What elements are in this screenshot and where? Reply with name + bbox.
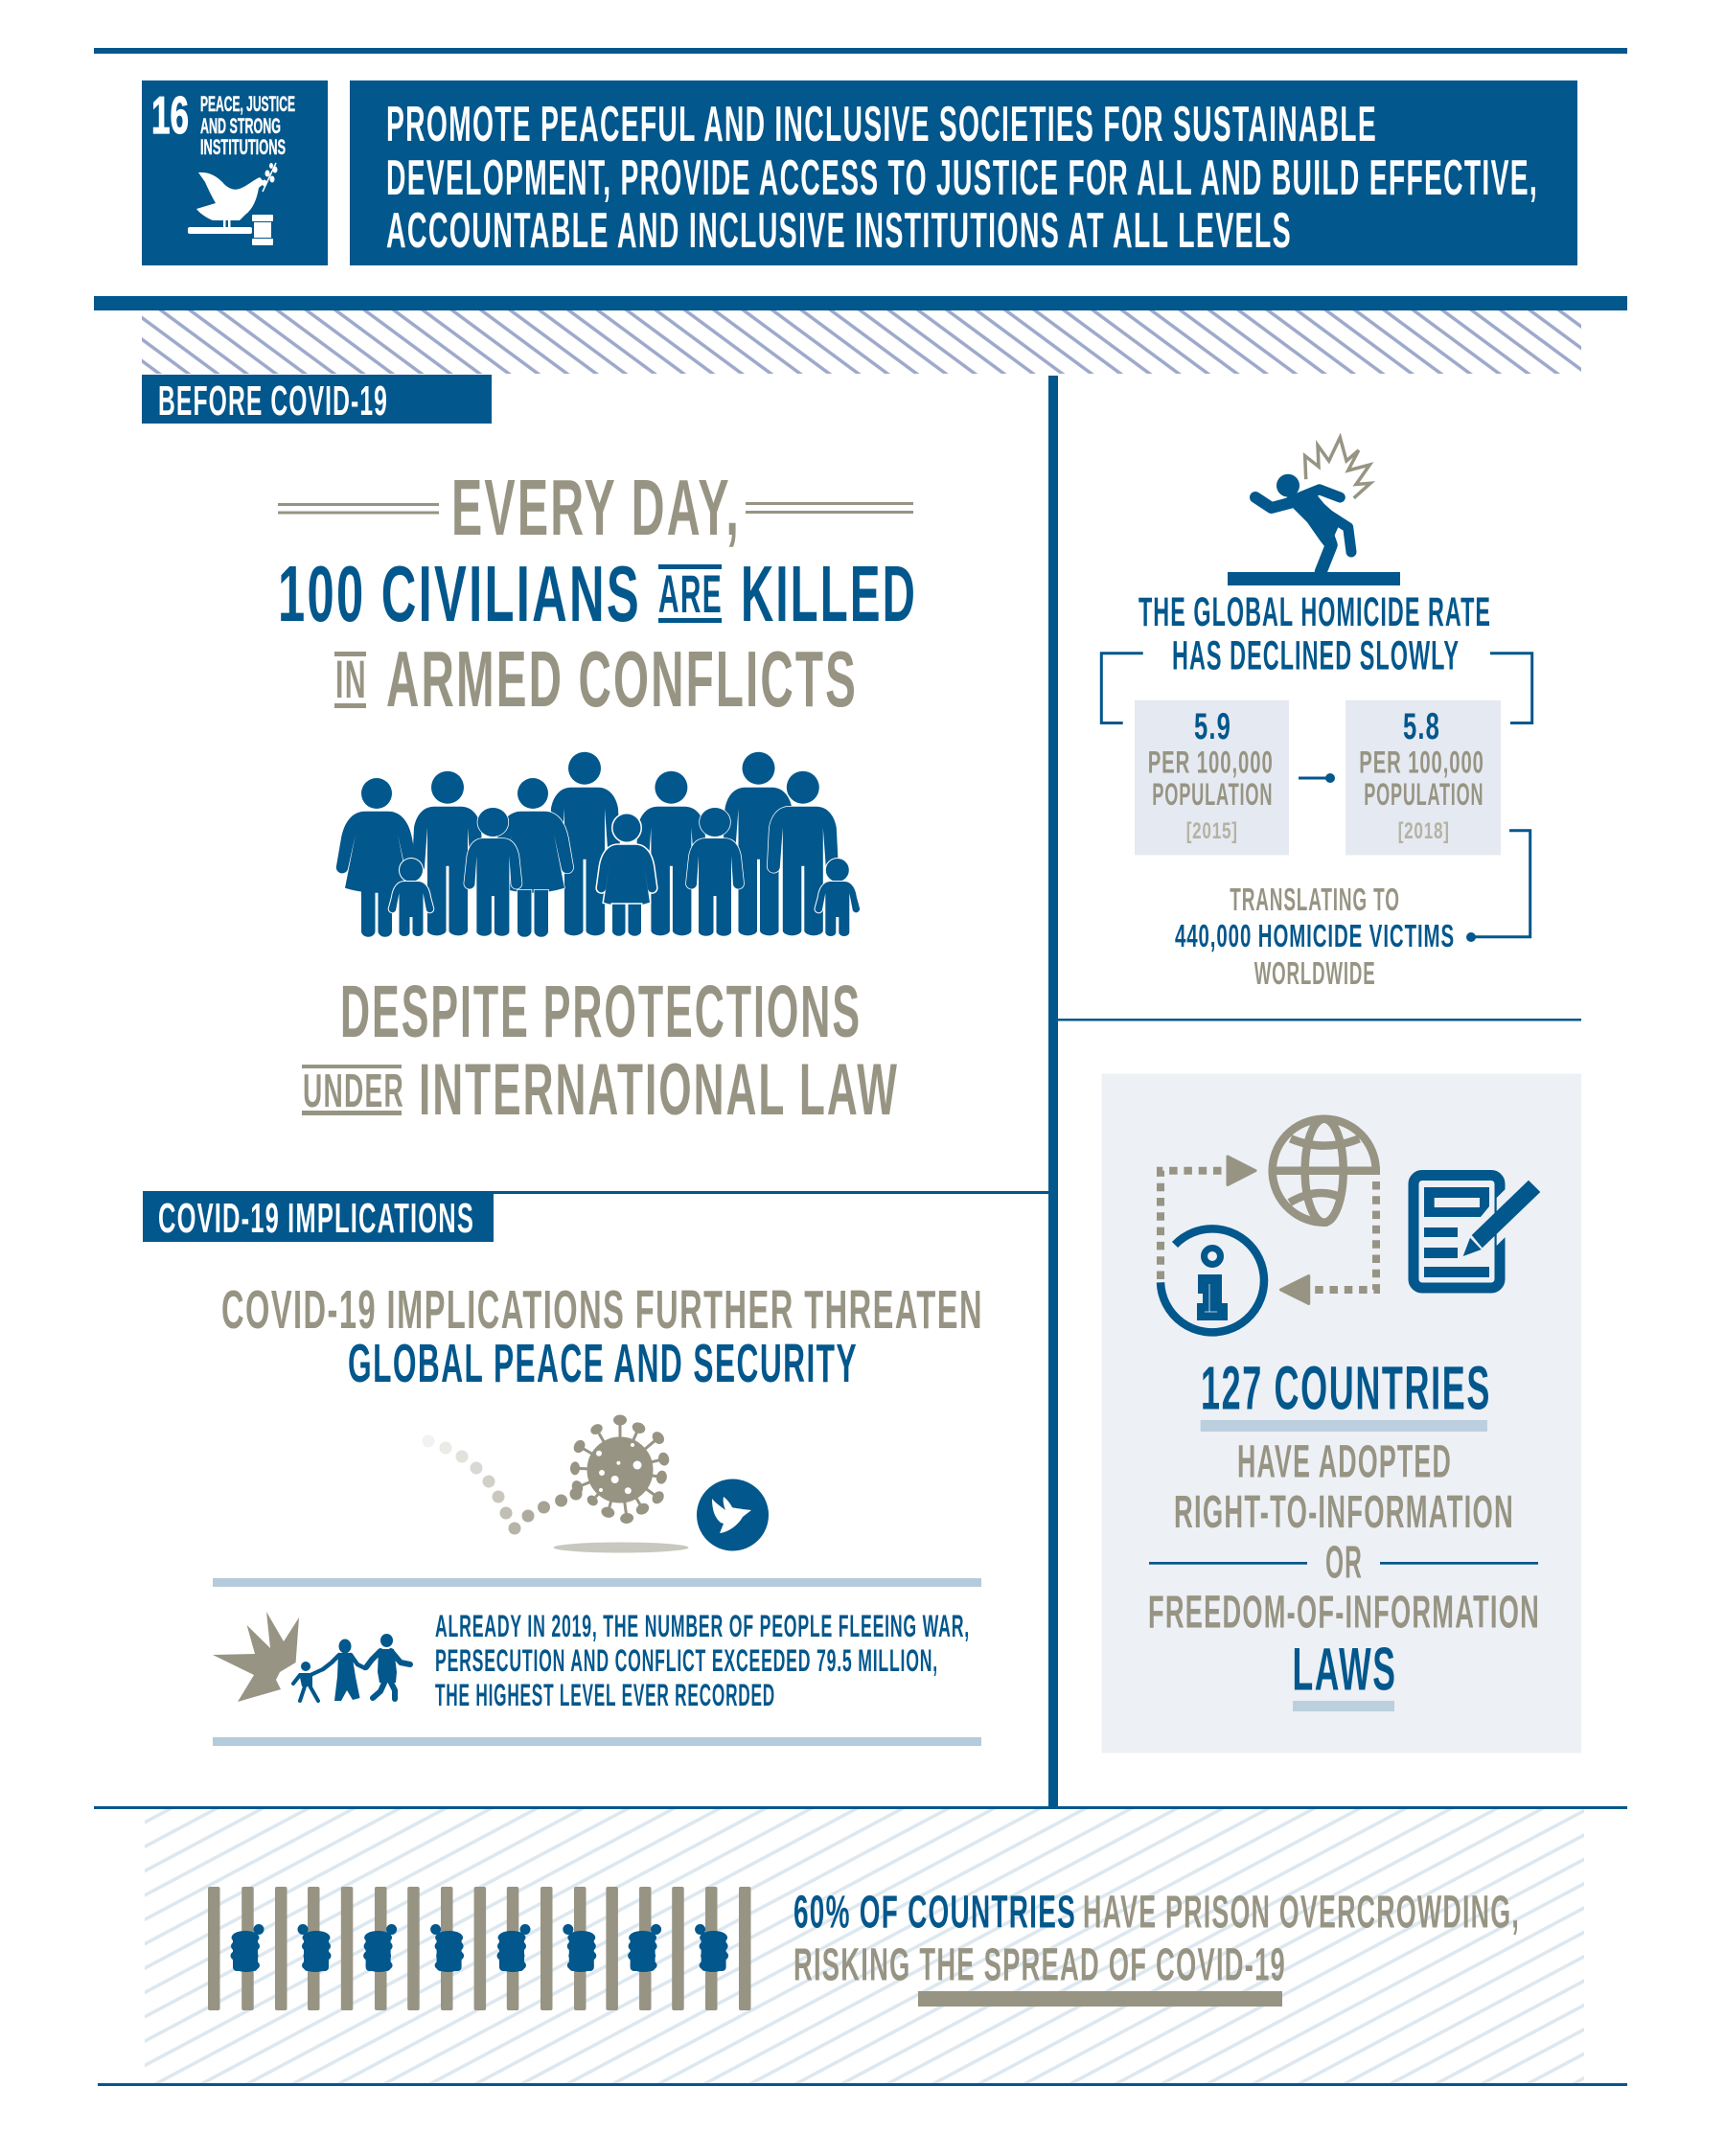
heading: every day 100 civilians: ARE [658,563,723,624]
heading: implications threaten peace [221,1279,983,1394]
section tag: covid-19 implications [143,1191,1048,1242]
peace dove badge [697,1479,769,1550]
heading: implications threaten peace: COVID-19 IMPLICATIONS FURTHER THREATEN [221,1279,983,1341]
arrow: dotted to info [1280,1181,1376,1303]
heading: every day 100 civilians: ARMED CONFLICTS [386,634,858,723]
panel: SDG 16 goal badge [142,80,328,265]
icon: family fleeing [293,1634,410,1701]
goal number: 16 [151,85,189,145]
heading: despite protections [302,971,899,1131]
panel: homicide rate [1101,437,1532,991]
stat box: 2018: 5.8 [1403,706,1440,747]
icon: globe [1273,1119,1380,1223]
text: 60 percent of countries: RISKING THE SPREAD OF COVID-19 [794,1939,1286,1991]
text: 127 countries [1201,1354,1491,1432]
panel: displaced people callout [213,1578,981,1746]
heading: homicide rate [1138,589,1491,678]
goal name: PEACE, JUSTICE [200,92,295,116]
heading: implications threaten peace: GLOBAL PEACE AND SECURITY [348,1333,858,1394]
text: homicide victims: TRANSLATING TO [1230,882,1400,917]
stat box: 2015: PER 100,000 [1148,745,1274,779]
heading: despite protections: DESPITE PROTECTIONS [340,971,862,1053]
text: refugees 79.5 million [435,1608,970,1712]
icon: explosion [213,1612,299,1702]
goal name: INSTITUTIONS [200,135,286,159]
heading: homicide rate: HAS DECLINED SLOWLY [1172,632,1460,678]
virus trail dots [422,1435,583,1535]
stat box: 2018: PER 100,000 [1359,745,1484,779]
icon: prison bars [208,1887,751,2010]
text: homicide victims [1175,882,1455,991]
section tag: before covid-19: BEFORE COVID-19 [158,378,388,424]
icon: person being hit [1228,437,1400,585]
stat box: 2018: [2018] [1398,818,1450,844]
heading: every day 100 civilians: IN [335,649,367,709]
top rule [94,48,1627,54]
text: homicide victims: 440,000 HOMICIDE VICTIMS [1175,918,1455,953]
text: homicide victims: WORLDWIDE [1254,955,1376,991]
panel: prison overcrowding [94,1806,1627,2086]
section tag: covid-19 implications: COVID-19 IMPLICATIONS [158,1196,474,1242]
icon: virus trajectory hitting peace dove [422,1414,769,1552]
text: 127 countries: 127 COUNTRIES [1201,1354,1491,1423]
stat box: 2018 [1346,700,1501,855]
text: 60 percent of countries [794,1887,1520,2007]
heading: every day 100 civilians: EVERY DAY, [451,463,741,552]
heading: despite protections: INTERNATIONAL LAW [419,1049,899,1131]
heading: every day 100 civilians [278,463,917,723]
stat box: 2015: POPULATION [1152,777,1273,812]
icon: information [1161,1228,1264,1332]
arrow: bracket to victims [1466,831,1530,942]
stat box: 2018: POPULATION [1364,777,1484,812]
goal name [200,92,295,159]
header base bar [94,296,1627,310]
text: have adopted laws [1148,1436,1540,1711]
heading: despite protections: UNDER [303,1066,404,1117]
icon: crowd of civilians [336,752,860,937]
text: refugees 79.5 million: ALREADY IN 2019, THE NUMBER OF PEOPLE FLEEING WAR, [435,1608,970,1643]
text: have adopted laws: HAVE ADOPTED [1237,1436,1452,1488]
goal name: AND STRONG [200,114,281,138]
panel: goal statement [350,80,1577,265]
text: 60 percent of countries: 60% OF COUNTRIES [794,1887,1076,1938]
text: have adopted laws: OR [1325,1537,1363,1589]
virus [570,1414,671,1525]
stat box: 2015: 5.9 [1194,706,1231,747]
heading: every day 100 civilians: 100 CIVILIANS [278,549,641,638]
icon: hands gripping bars [230,1924,728,1972]
arrow: dotted to globe [1161,1157,1255,1279]
text: refugees 79.5 million: PERSECUTION AND CONFLICT EXCEEDED 79.5 MILLION, [435,1642,938,1678]
stat box: 2015: [2015] [1186,818,1238,844]
icon: dove and gavel [188,163,278,245]
icon: document and pencil [1414,1175,1540,1288]
stat box: 2015 [1135,700,1289,855]
text: have adopted laws: LAWS [1292,1636,1397,1703]
heading: every day 100 civilians: KILLED [741,549,917,638]
text: refugees 79.5 million: THE HIGHEST LEVEL EVER RECORDED [435,1677,775,1712]
virus shadow [554,1543,688,1552]
arrow: decline connector [1299,773,1335,783]
panel: right to information laws [1102,1073,1581,1754]
